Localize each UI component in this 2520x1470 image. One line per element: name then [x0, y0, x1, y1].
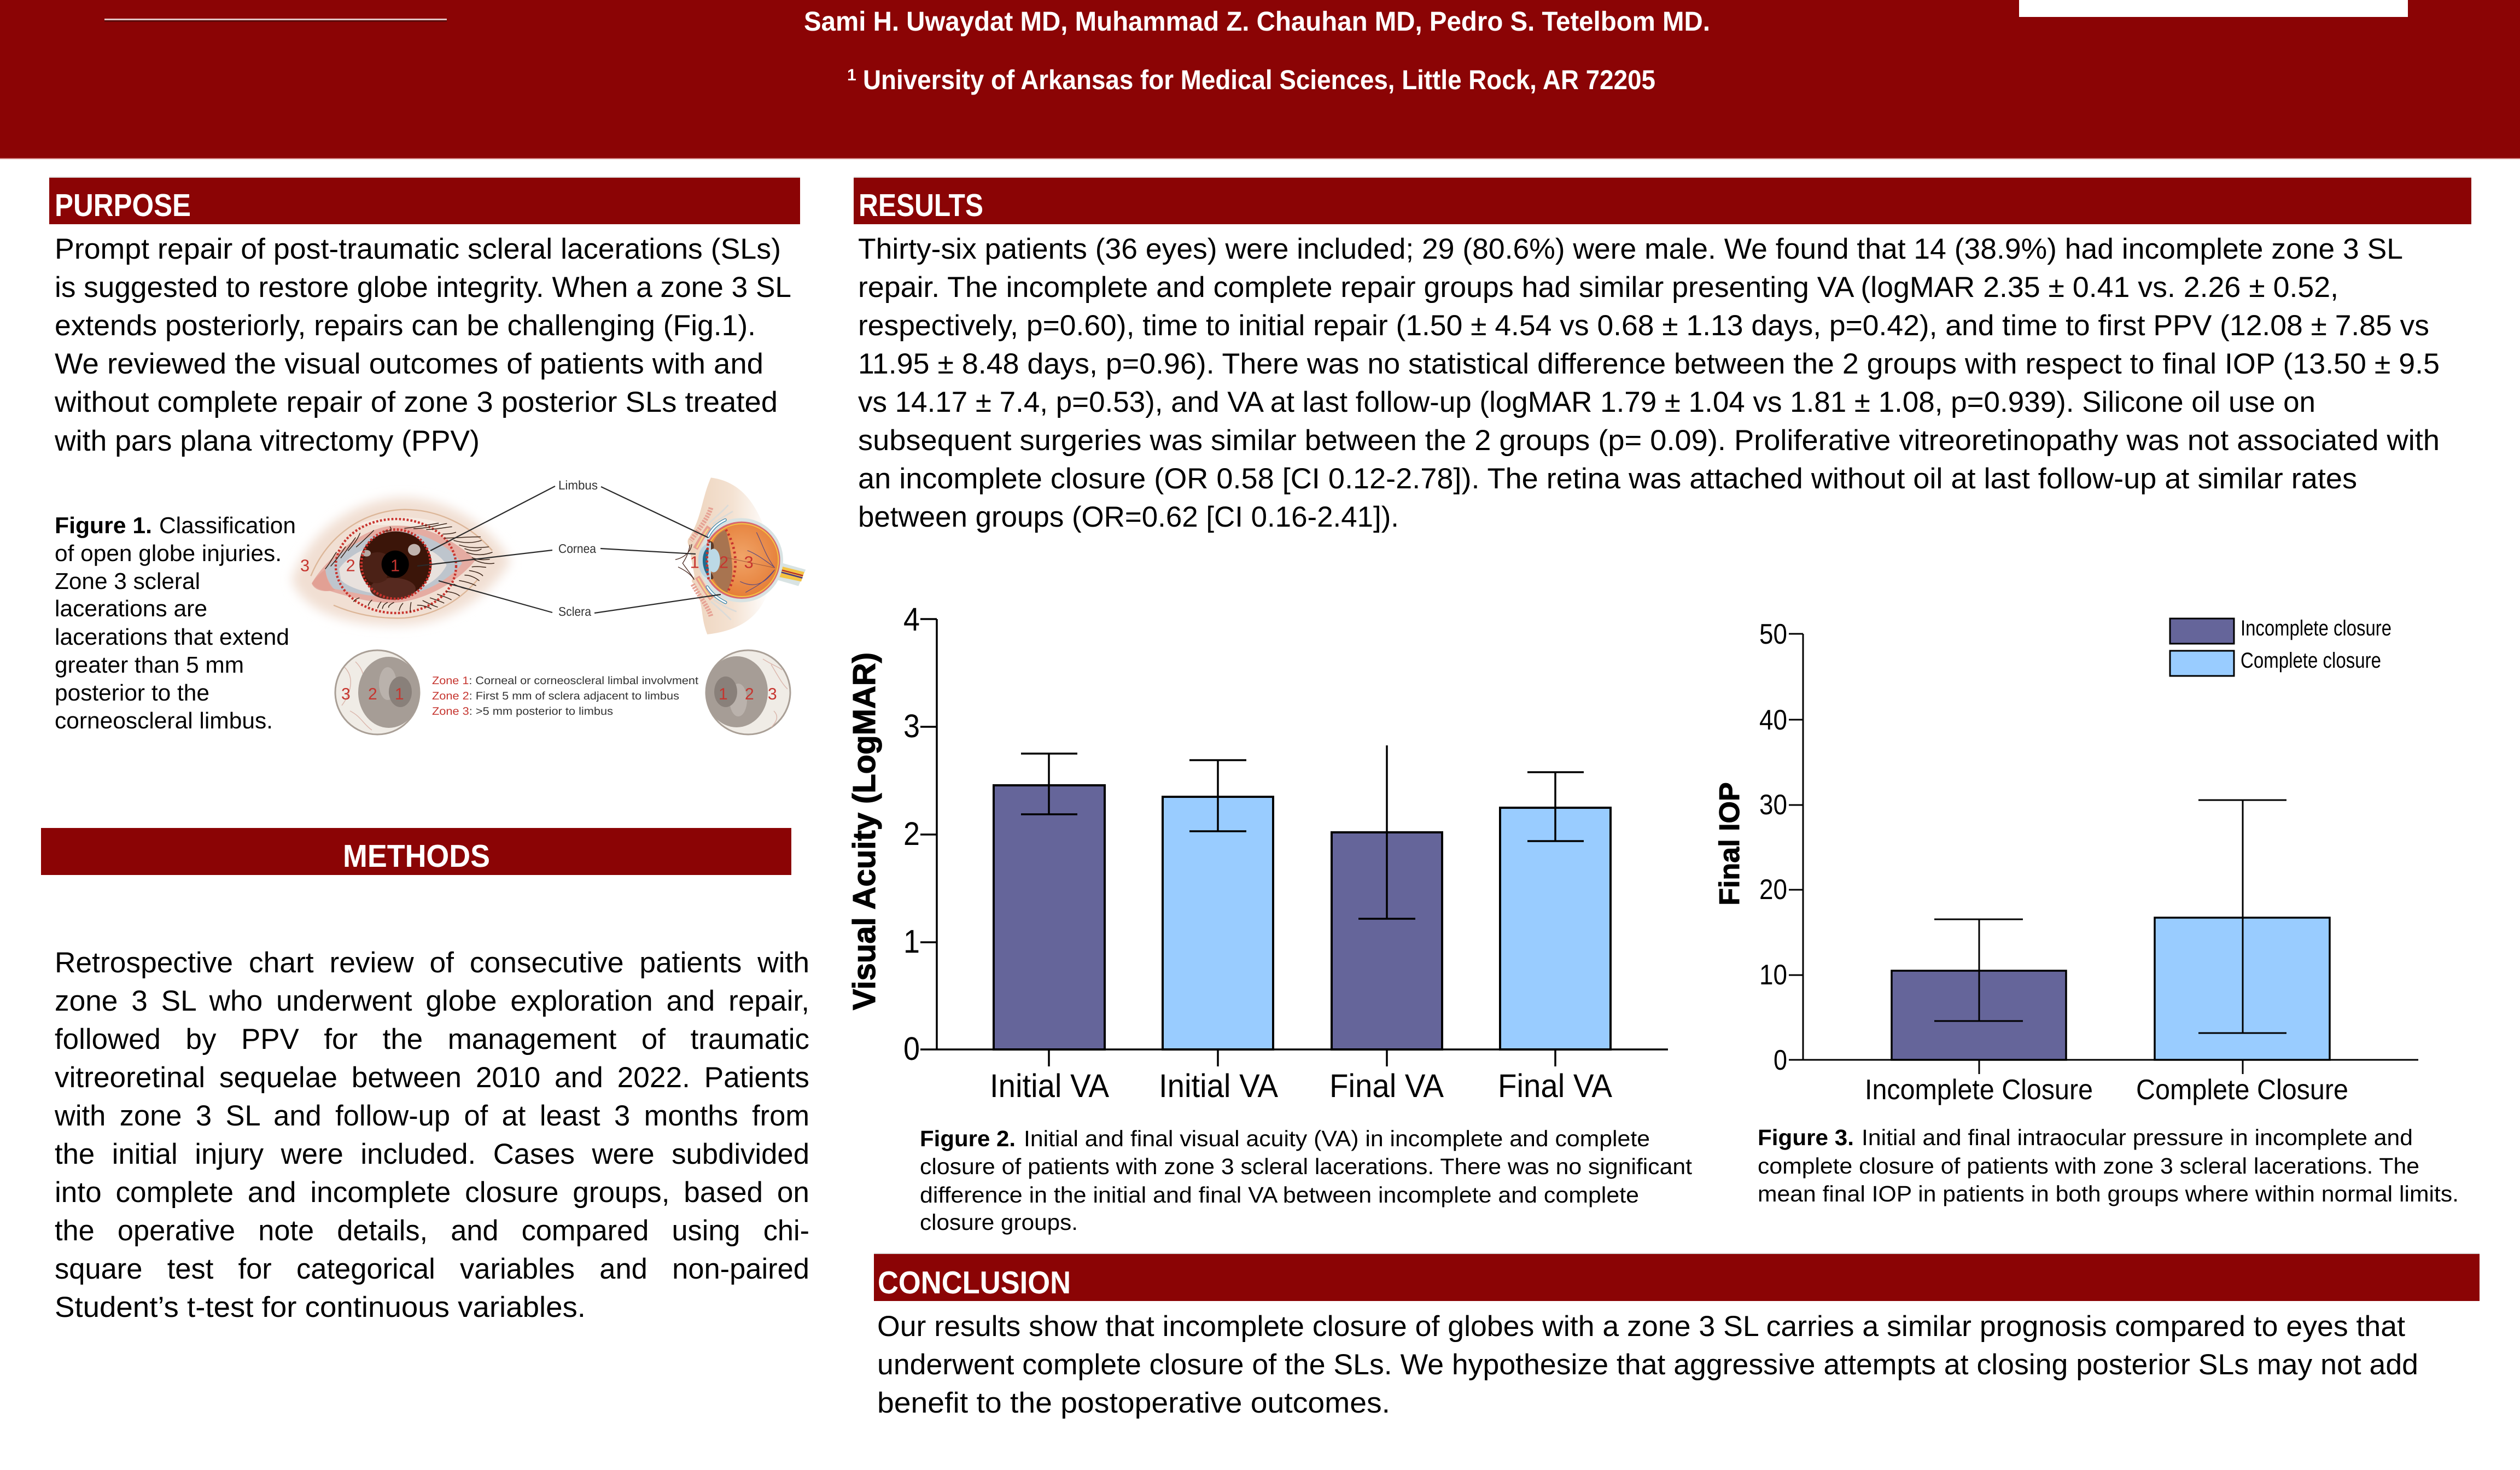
bars	[1892, 918, 2330, 1060]
zone legend: Zone 1 : Corneal or corneoscleral limbal involvment	[432, 675, 698, 687]
x category labels: Final VA	[1329, 1068, 1444, 1104]
figure 1 caption: Classification	[159, 512, 296, 538]
x category labels: Incomplete Closure	[1865, 1074, 2093, 1106]
methods text: zone 3 SL who underwent globe exploration and repair,	[55, 985, 809, 1017]
figure 2 caption: closure of patients with zone 3 scleral lacerations. There was no significant	[920, 1154, 1693, 1179]
purpose heading: PURPOSE	[55, 188, 191, 223]
results text: 11.95 ± 8.48 days, p=0.96). There was no statistical difference between the 2 groups with respect to final IOP (13.50 ± 9.5	[858, 348, 2440, 380]
x category labels: Final VA	[1498, 1068, 1612, 1104]
methods text: Student’s t-test for continuous variables.	[55, 1291, 586, 1323]
results text: Thirty-six patients (36 eyes) were included; 29 (80.6%) were male. We found that 14 (38.9%) had incomplete zone 3 SL	[858, 233, 2403, 265]
left eyeball zones: 3	[341, 685, 351, 703]
bar chart: final IOP	[1714, 616, 2418, 1106]
left eyeball zones: 2	[368, 685, 377, 703]
y tick labels: 30	[1759, 789, 1787, 821]
figure 3 caption: complete closure of patients with zone 3 scleral lacerations. The	[1758, 1153, 2419, 1179]
figure 1: side view of eye with zones: 1	[690, 553, 699, 571]
y tick labels: 20	[1759, 874, 1787, 906]
x category labels	[1865, 1074, 2348, 1106]
figure 1 caption: Zone 3 scleral	[55, 568, 200, 594]
figure 1 caption: of open globe injuries.	[55, 540, 282, 566]
header banner	[0, 0, 2520, 159]
y tick labels: 50	[1759, 619, 1787, 650]
anatomy labels: Sclera	[558, 604, 591, 619]
anatomy labels: Cornea	[558, 541, 596, 556]
panel: purpose	[49, 177, 806, 734]
methods text: with zone 3 SL and follow-up of at least 3 months from	[54, 1100, 809, 1132]
right eyeball zones: 2	[745, 685, 754, 703]
bar chart: visual acuity	[847, 601, 1668, 1104]
x category labels	[990, 1068, 1612, 1104]
figure 1: front view of eye with zones: 3	[300, 556, 310, 575]
affiliation: University of Arkansas for Medical Sciences, Little Rock, AR 72205	[863, 65, 1655, 95]
y tick labels: 4	[903, 601, 920, 638]
methods text: vitreoretinal sequelae between 2010 and 2022. Patients	[55, 1061, 809, 1094]
purpose text: Prompt repair of post-traumatic scleral lacerations (SLs)	[55, 233, 781, 265]
legend: Incomplete closure	[2241, 616, 2391, 640]
leader lines	[417, 486, 721, 613]
figure 3 caption: Figure 3.	[1758, 1125, 1854, 1150]
purpose text	[54, 233, 791, 457]
figure 1: front view of eye with zones: 1	[390, 556, 400, 575]
right eyeball zones: 3	[768, 685, 777, 703]
figure 1: side view of eye with zones: 3	[744, 553, 754, 571]
axes	[920, 619, 1668, 1066]
conclusion text: underwent complete closure of the SLs. We hypothesize that aggressive attempts at closing posterior SLs may not add	[877, 1349, 2418, 1381]
anatomy labels	[558, 478, 598, 619]
authors: Sami H. Uwaydat MD, Muhammad Z. Chauhan MD, Pedro S. Tetelbom MD.	[804, 6, 1710, 37]
y tick labels: 2	[903, 815, 920, 852]
x category labels: Initial VA	[990, 1068, 1109, 1104]
methods text: Retrospective chart review of consecutive patients with	[55, 947, 809, 979]
results text: respectively, p=0.60), time to initial repair (1.50 ± 4.54 vs 0.68 ± 1.13 days, p=0.42), and time to first PPV (12.08 ± 7.85 vs	[858, 310, 2429, 342]
y tick labels	[1759, 619, 1787, 1076]
panel: conclusion	[874, 1253, 2480, 1419]
figure 1: side view of eye with zones: 2	[719, 553, 728, 571]
y tick labels	[903, 601, 920, 1067]
figure 1: front view of eye with zones: 2	[346, 556, 355, 575]
x category labels: Complete Closure	[2136, 1074, 2348, 1106]
figure 1 caption: lacerations are	[55, 596, 207, 621]
methods text: the operative note details, and compared using chi-	[55, 1215, 809, 1247]
y tick labels: 40	[1759, 704, 1787, 736]
left eyeball zones: 1	[395, 685, 404, 703]
left eyeball zones	[335, 650, 419, 734]
methods heading	[41, 828, 791, 875]
methods heading: METHODS	[343, 838, 490, 874]
results heading	[854, 177, 2471, 224]
results text	[858, 233, 2440, 533]
anatomy labels: Limbus	[558, 478, 598, 492]
results text: repair. The incomplete and complete repair groups had similar presenting VA (logMAR 2.35 ± 0.41 vs. 2.26 ± 0.52,	[858, 271, 2338, 304]
zone legend: Zone 2 : First 5 mm of sclera adjacent to limbus	[432, 690, 679, 702]
results text: an incomplete closure (OR 0.58 [CI 0.12-2.78]). The retina was attached without oil at last follow-up at similar rates	[858, 463, 2357, 495]
purpose text: We reviewed the visual outcomes of patients with and	[55, 348, 763, 380]
results text: between groups (OR=0.62 [CI 0.16-2.41]).	[858, 501, 1399, 533]
figure 3 caption	[1758, 1125, 2459, 1206]
figure 1 caption: posterior to the	[55, 680, 209, 705]
purpose text: is suggested to restore globe integrity. When a zone 3 SL	[55, 271, 791, 304]
title underline remnant	[104, 19, 447, 22]
legend	[2170, 616, 2391, 676]
results heading: RESULTS	[859, 188, 983, 223]
figure 2 caption	[920, 1126, 1693, 1235]
y tick labels: 0	[903, 1030, 920, 1067]
right eyeball zones	[705, 650, 790, 734]
purpose text: extends posteriorly, repairs can be challenging (Fig.1).	[55, 310, 756, 342]
axes	[1789, 634, 2418, 1074]
results text: subsequent surgeries was similar between the 2 groups (p= 0.09). Proliferative vitreoretinopathy was not associated with	[858, 424, 2440, 457]
x category labels: Initial VA	[1159, 1068, 1278, 1104]
legend: Complete closure	[2241, 649, 2381, 673]
y tick labels: 3	[903, 708, 920, 744]
conclusion heading	[874, 1253, 2480, 1301]
panel: results	[847, 177, 2471, 1235]
figure 2 caption: closure groups.	[920, 1210, 1078, 1235]
y tick labels: 1	[903, 923, 920, 960]
bars	[994, 785, 1611, 1049]
figure 1 caption: greater than 5 mm	[55, 652, 244, 678]
methods text	[54, 947, 809, 1323]
y tick labels: 10	[1759, 959, 1787, 991]
figure 3 caption: mean final IOP in patients in both groups where within normal limits.	[1758, 1181, 2459, 1206]
affiliation: 1	[847, 66, 856, 84]
figure 2 caption: Figure 2.	[920, 1126, 1016, 1151]
figure 2 caption: difference in the initial and final VA between incomplete and complete	[920, 1182, 1639, 1208]
figure 1: front view of eye with zones	[291, 498, 510, 625]
purpose text: without complete repair of zone 3 posterior SLs treated	[54, 386, 778, 418]
panel: methods	[41, 828, 809, 1323]
error bars	[1021, 745, 1584, 919]
conclusion heading: CONCLUSION	[878, 1265, 1071, 1300]
figure 2 caption: Initial and final visual acuity (VA) in incomplete and complete	[1024, 1126, 1650, 1151]
y axis title: Final IOP	[1714, 782, 1746, 906]
purpose text: with pars plana vitrectomy (PPV)	[54, 425, 480, 457]
figure 1 caption: corneoscleral limbus.	[55, 708, 273, 733]
error bars	[1934, 800, 2286, 1033]
figure 3 caption: Initial and final intraocular pressure in incomplete and	[1862, 1125, 2413, 1150]
y tick labels: 0	[1774, 1045, 1787, 1076]
figure 1 caption	[55, 512, 296, 733]
methods text: the initial injury were included. Cases were subdivided	[55, 1138, 809, 1170]
figure 1 caption: lacerations that extend	[55, 624, 289, 650]
methods text: into complete and incomplete closure groups, based on	[55, 1176, 809, 1209]
figure 1 caption: Figure 1.	[55, 512, 152, 538]
logo placeholder box	[2019, 0, 2408, 17]
conclusion text: Our results show that incomplete closure of globes with a zone 3 SL carries a similar prognosis compared to eyes that	[877, 1310, 2405, 1343]
methods text: followed by PPV for the management of traumatic	[55, 1023, 809, 1055]
y axis title: Visual Acuity (LogMAR)	[847, 652, 882, 1010]
zone legend	[432, 675, 698, 718]
methods text: square test for categorical variables and non-paired	[55, 1253, 809, 1285]
figure 1: side view of eye with zones	[675, 477, 806, 634]
conclusion text	[877, 1310, 2418, 1419]
purpose heading	[49, 177, 800, 224]
conclusion text: benefit to the postoperative outcomes.	[877, 1387, 1390, 1419]
zone legend: Zone 3 : >5 mm posterior to limbus	[432, 705, 613, 718]
right eyeball zones: 1	[719, 685, 728, 703]
results text: vs 14.17 ± 7.4, p=0.53), and VA at last follow-up (logMAR 1.79 ± 1.04 vs 1.81 ± 1.08, p=0.939). Silicone oil use on	[858, 386, 2315, 418]
